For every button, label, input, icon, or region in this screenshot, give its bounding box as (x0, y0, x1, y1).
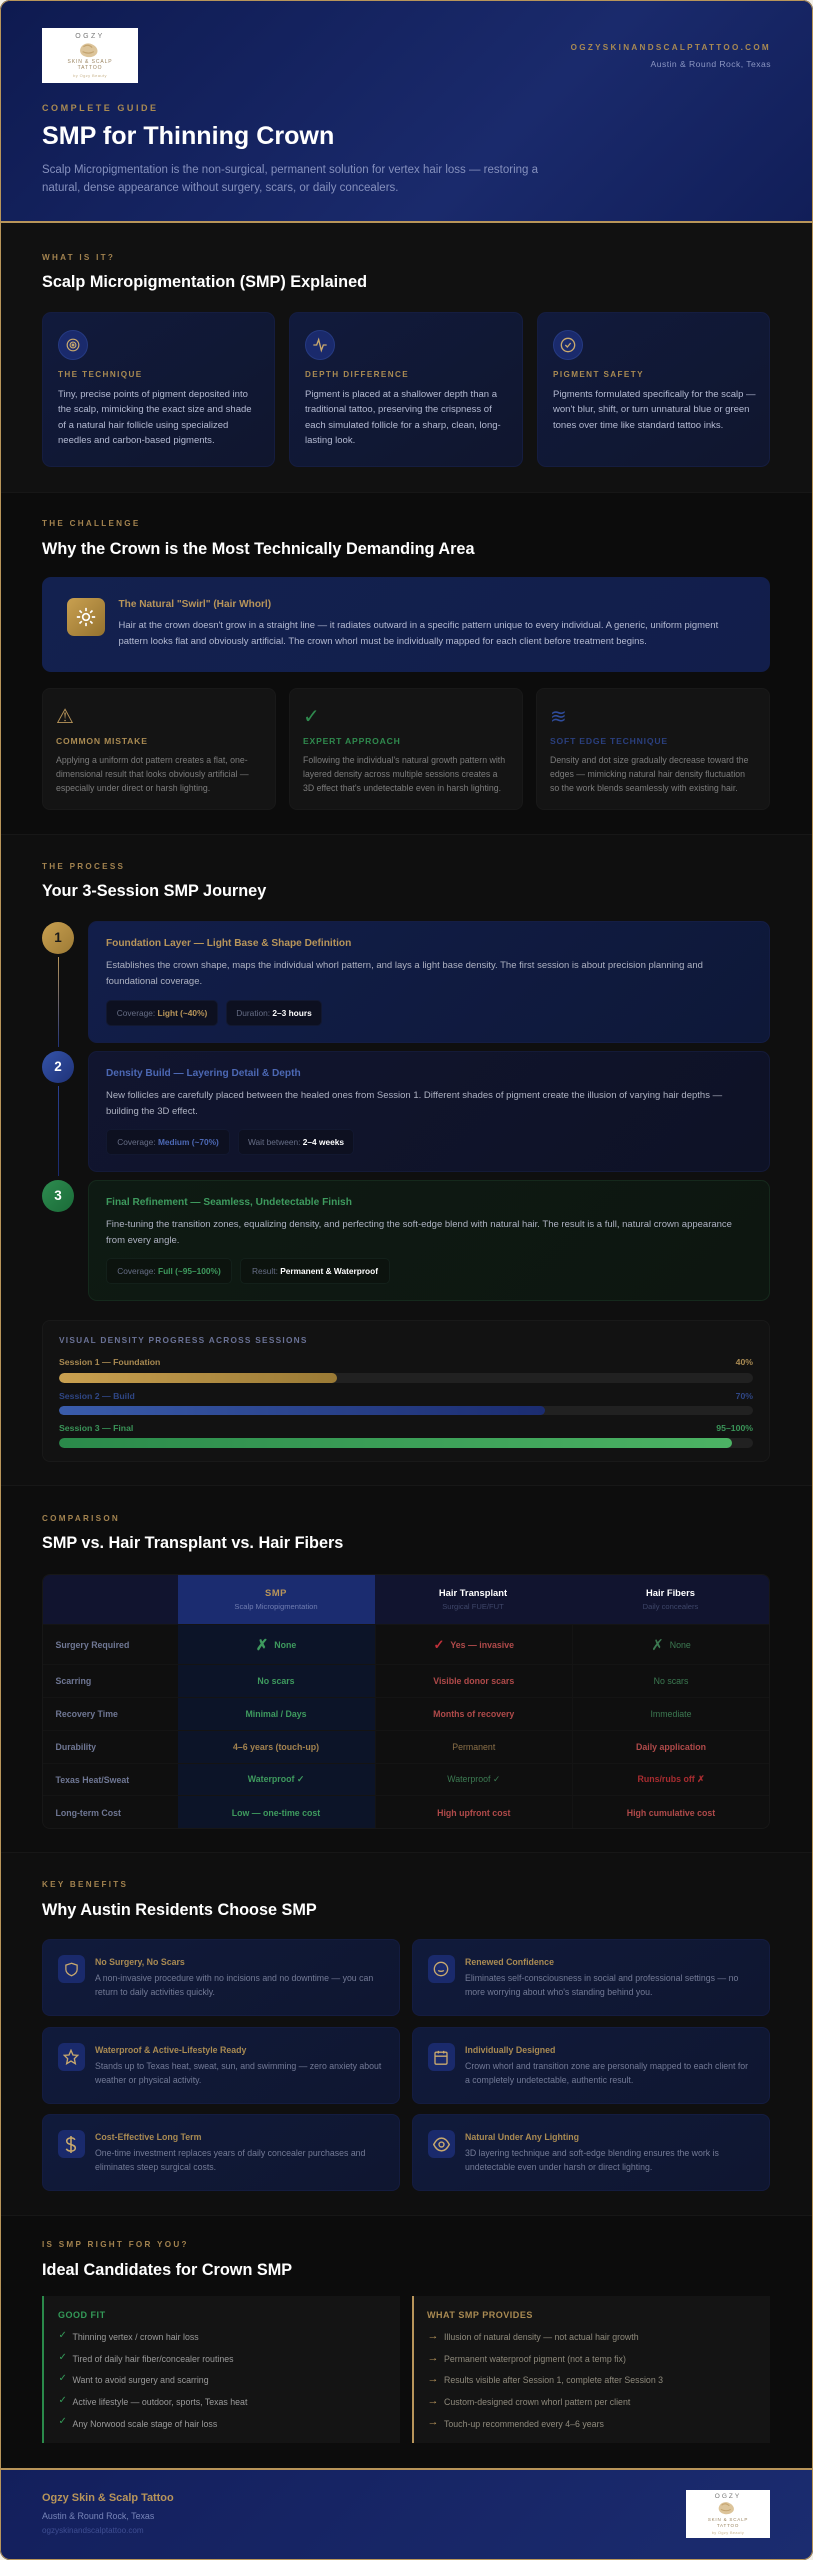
callout text: Hair at the crown doesn't grow in a straight line — it radiates outward in a specific pattern unique to every individual. A generic, uniform pigment (118, 620, 718, 631)
card: depth difference: each simulated follicle for a sharp, clean, long- (305, 420, 501, 431)
row: recovery time: Months of recovery (433, 1709, 514, 1719)
row: scarring: No scars (257, 1676, 295, 1686)
step number 2 (42, 1051, 74, 1083)
row: durability (43, 1730, 769, 1763)
benefit: natural lighting (412, 2114, 770, 2191)
row: long-term cost: Low — one-time cost (232, 1808, 320, 1818)
card: depth difference: DEPTH DIFFERENCE (305, 370, 409, 379)
eyebrow: COMPLETE GUIDE (42, 103, 159, 113)
section label: benefits: KEY BENEFITS (42, 1880, 128, 1889)
benefit: individually designed: a completely undetectable, authentic result. (465, 2075, 633, 2085)
step number 3 (42, 1180, 74, 1212)
callout: natural swirl (42, 577, 770, 672)
card: the technique: the scalp, mimicking the exact size and shade (58, 404, 252, 415)
card: expert approach: Following the individual's natural growth pattern with (303, 755, 505, 765)
step 1 card: foundational coverage. (106, 976, 202, 987)
row: surgery required (43, 1624, 769, 1664)
section heading: process: Your 3-Session SMP Journey (42, 882, 266, 900)
section heading: what is it: Scalp Micropigmentation (SMP) Explained (42, 273, 367, 291)
footer logo mark (718, 2502, 734, 2514)
list: good fit (58, 2330, 248, 2429)
benefit: cost-effective: Cost-Effective Long Term (95, 2132, 201, 2142)
list: good fit: Any Norwood scale stage of hair loss (72, 2419, 217, 2429)
card: common mistake: especially under direct or harsh lighting. (56, 783, 210, 793)
row: texas heat (43, 1763, 769, 1795)
list: what smp provides: → (428, 2330, 438, 2342)
list: what smp provides: Permanent waterproof pigment (not a temp fix) (444, 2354, 626, 2364)
panel: what smp provides: WHAT SMP PROVIDES (427, 2310, 533, 2320)
benefit: individually designed: Individually Designed (465, 2045, 555, 2055)
chip: wait (238, 1129, 354, 1155)
section background: challenge (0, 492, 813, 834)
row: durability: 4–6 years (touch-up) (233, 1742, 319, 1752)
list: what smp provides (428, 2330, 663, 2429)
row: durability: Durability (56, 1742, 96, 1752)
icon: star (58, 2043, 84, 2071)
section label: candidates: IS SMP RIGHT FOR YOU? (42, 2240, 189, 2249)
benefit: waterproof (42, 2027, 400, 2104)
website: OGZYSKINANDSCALPTATTOO.COM (571, 43, 771, 52)
icon: warning: ⚠ (56, 706, 74, 728)
logo: OGZY (75, 32, 105, 40)
chip: result: Result: Permanent & Waterproof (252, 1266, 378, 1276)
subtitle: natural, dense appearance without surgery, scars, or daily concealers. (42, 182, 398, 194)
benefit: renewed confidence: Eliminates self-consciousness in social and professional settings — no (465, 1973, 738, 1983)
row: surgery required: Surgery Required (56, 1640, 129, 1650)
icon: smile (428, 1955, 454, 1983)
benefit: cost-effective: eliminates steep surgical costs. (95, 2162, 216, 2172)
chip: coverage (106, 1129, 230, 1155)
list: what smp provides: → (428, 2416, 438, 2428)
card: soft edge technique (536, 688, 770, 810)
list: good fit: ✓ (58, 2373, 67, 2384)
list: what smp provides: → (428, 2352, 438, 2364)
card: the technique: needles and carbon-based pigments. (58, 435, 215, 446)
title: SMP for Thinning Crown (42, 122, 334, 150)
step 3 card: Fine-tuning the transition zones, equalizing density, and perfecting the soft-edge blend with natural hair. The result is a full, natural crown appearance (106, 1219, 732, 1230)
benefit: cost-effective (42, 2114, 400, 2191)
logo mark (80, 43, 98, 58)
icon: calendar (428, 2043, 454, 2071)
row: scarring: No scars (654, 1676, 688, 1686)
card: expert approach: EXPERT APPROACH (303, 736, 401, 746)
card: soft edge technique: Density and dot size gradually decrease toward the (550, 755, 748, 765)
bar: session 1: 40% (736, 1357, 753, 1367)
row: durability: Daily application (636, 1742, 706, 1752)
section heading: challenge: Why the Crown is the Most Technically Demanding Area (42, 540, 474, 558)
list: good fit: Want to avoid surgery and scarring (72, 2375, 209, 2385)
list: what smp provides: → (428, 2373, 438, 2385)
icon: dollar (58, 2130, 84, 2158)
row: recovery time: Minimal / Days (245, 1709, 307, 1719)
benefit: no surgery: No Surgery, No Scars (95, 1957, 185, 1967)
panel: good fit (42, 2296, 400, 2443)
row: surgery required: ✓ (434, 1636, 444, 1652)
callout title: The Natural "Swirl" (Hair Whorl) (118, 599, 271, 610)
table header (43, 1575, 769, 1625)
benefit: cost-effective: One-time investment replaces years of daily concealer purchases and (95, 2148, 365, 2158)
section label: comparison: COMPARISON (42, 1514, 120, 1523)
list: good fit: Tired of daily hair fiber/concealer routines (72, 2354, 234, 2364)
step 3 card: from every angle. (106, 1235, 179, 1246)
row: surgery required: None (274, 1640, 296, 1650)
list: what smp provides: → (428, 2394, 438, 2406)
list: good fit: Active lifestyle — outdoor, sports, Texas heat (72, 2397, 247, 2407)
row: scarring (43, 1664, 769, 1697)
card: expert approach: layered density across multiple sessions creates a (303, 769, 498, 779)
column: hair transplant: Surgical FUE/FUT (442, 1602, 504, 1611)
card: depth difference: traditional tattoo, preserving the crispness of (305, 404, 492, 415)
card: common mistake: Applying a uniform dot pattern creates a flat, one- (56, 755, 248, 765)
icon: check circle (553, 330, 583, 360)
footer (0, 2468, 813, 2560)
benefit: natural lighting: undetectable even under harsh or direct lighting. (465, 2162, 652, 2172)
icon: eye (428, 2130, 454, 2158)
panel: good fit: GOOD FIT (58, 2310, 106, 2320)
column: SMP: Scalp Micropigmentation (234, 1602, 318, 1611)
benefit: no surgery: return to daily activities quickly. (95, 1987, 215, 1997)
step number 3: 3 (54, 1188, 62, 1203)
callout text: pattern looks flat and obviously artificial. The crown whorl must be individually mapped for each client before treatment begins. (118, 636, 647, 647)
icon: shield (58, 1955, 84, 1983)
card: depth difference (289, 312, 523, 467)
chip: coverage: Coverage: Medium (~70%) (117, 1137, 219, 1147)
list: what smp provides: Results visible after Session 1, complete after Session 3 (444, 2375, 663, 2385)
section background: benefits (0, 1852, 813, 2215)
card: soft edge technique: so the work blends seamlessly with existing hair. (550, 783, 738, 793)
section heading: benefits: Why Austin Residents Choose SMP (42, 1901, 317, 1919)
row: scarring: Visible donor scars (433, 1676, 514, 1686)
row: surgery required: ✗ (651, 1636, 664, 1654)
row: recovery time: Recovery Time (56, 1709, 118, 1719)
footer logo: SKIN & SCALP (708, 2517, 748, 2522)
card: common mistake: dimensional result that looks obviously artificial — (56, 769, 249, 779)
row: long-term cost: Long-term Cost (56, 1808, 121, 1818)
benefit: waterproof: Stands up to Texas heat, sweat, sun, and swimming — zero anxiety about (95, 2061, 381, 2071)
bar: session 2: Session 2 — Build (59, 1390, 135, 1400)
list: what smp provides: Touch-up recommended every 4–6 years (444, 2419, 604, 2429)
panel: what smp provides (412, 2296, 770, 2443)
row: long-term cost: High cumulative cost (627, 1808, 715, 1818)
card: common mistake (42, 688, 276, 810)
benefit: natural lighting: Natural Under Any Lighting (465, 2132, 579, 2142)
card: the technique (42, 312, 275, 467)
list: good fit: Thinning vertex / crown hair loss (72, 2332, 199, 2342)
step 1 card (88, 921, 770, 1043)
benefit: individually designed: Crown whorl and transition zone are personally mapped to each client for (465, 2061, 748, 2071)
column: hair fibers: Hair Fibers (646, 1587, 695, 1598)
step 3 card: Final Refinement — Seamless, Undetectable Finish (106, 1197, 352, 1208)
row: recovery time (43, 1697, 769, 1730)
card: pigment safety: Pigments formulated specifically for the scalp — (553, 388, 756, 400)
section label: challenge: THE CHALLENGE (42, 519, 141, 528)
benefit: no surgery (42, 1939, 400, 2016)
list: what smp provides: Illusion of natural density — not actual hair growth (444, 2332, 639, 2342)
logo: TATTOO (78, 65, 102, 71)
step number 1 (42, 922, 74, 954)
column: hair transplant (439, 1587, 507, 1611)
bar: session 2: 70% (736, 1390, 753, 1400)
footer location: Austin & Round Rock, Texas (42, 2511, 154, 2521)
chip: coverage: Coverage: Full (~95–100%) (117, 1266, 221, 1276)
bar: session 3 (59, 1423, 753, 1448)
benefit: renewed confidence: more worrying about who's standing behind you. (465, 1987, 652, 1997)
benefit: no surgery: A non-invasive procedure with no incisions and no downtime — you can (95, 1973, 373, 1983)
footer logo: by Ogzy Beauty (712, 2530, 744, 2534)
row: recovery time: Immediate (650, 1709, 692, 1719)
row: texas heat: Waterproof ✓ (248, 1774, 304, 1784)
bar: session 3: 95–100% (716, 1423, 753, 1433)
benefit: natural lighting: 3D layering technique and soft-edge blending ensures the work is (465, 2148, 719, 2158)
row: surgery required: ✗ (256, 1636, 268, 1654)
step 2 card: building the 3D effect. (106, 1106, 198, 1117)
step 1 card: Foundation Layer — Light Base & Shape Definition (106, 938, 351, 949)
column: SMP: SMP (265, 1587, 287, 1598)
list: good fit: ✓ (58, 2416, 67, 2427)
column: SMP (178, 1575, 374, 1625)
list: what smp provides: Custom-designed crown whorl pattern per client (444, 2397, 630, 2407)
row: long-term cost: High upfront cost (437, 1808, 510, 1818)
section heading: comparison: SMP vs. Hair Transplant vs. Hair Fibers (42, 1534, 343, 1552)
chip: duration: Duration: 2–3 hours (236, 1008, 312, 1018)
column: hair fibers: Daily concealers (643, 1602, 698, 1611)
list: good fit: ✓ (58, 2330, 67, 2341)
section background: process (0, 834, 813, 1485)
card: pigment safety: PIGMENT SAFETY (553, 370, 644, 379)
panel title: VISUAL DENSITY PROGRESS ACROSS SESSIONS (59, 1335, 308, 1345)
footer logo: TATTOO (717, 2522, 739, 2528)
section background: what is it (0, 223, 813, 492)
connector 2 to 3 (58, 1086, 59, 1176)
column: hair fibers (643, 1587, 698, 1611)
icon: pulse (305, 330, 335, 360)
comparison table (42, 1574, 770, 1829)
icon: target (58, 330, 88, 360)
bar: session 1: Session 1 — Foundation (59, 1357, 160, 1367)
card: the technique: THE TECHNIQUE (58, 370, 143, 379)
step number 2: 2 (54, 1059, 62, 1074)
card: soft edge technique: SOFT EDGE TECHNIQUE (550, 736, 668, 746)
card: pigment safety: tones over time like standard tattoo inks. (553, 420, 723, 431)
icon: sun whorl (67, 598, 105, 636)
step 2 card: Density Build — Layering Detail & Depth (106, 1068, 301, 1079)
row: durability: Permanent (452, 1742, 495, 1752)
row: texas heat: Waterproof ✓ (447, 1774, 500, 1784)
row: long-term cost (43, 1795, 769, 1829)
benefit: renewed confidence: Renewed Confidence (465, 1957, 554, 1967)
bar: session 3: Session 3 — Final (59, 1423, 133, 1433)
row: texas heat: Runs/rubs off ✗ (638, 1774, 704, 1784)
bar: session 1 (59, 1357, 753, 1383)
benefit: renewed confidence (412, 1939, 770, 2016)
step 2 card: New follicles are carefully placed between the healed ones from Session 1. Different shades of pigment create the illusion of varying hair depths — (106, 1090, 722, 1101)
section background: comparison (0, 1485, 813, 1852)
icon: waves: ≋ (550, 706, 567, 728)
card: depth difference: Pigment is placed at a shallower depth than a (305, 388, 497, 400)
subtitle (42, 164, 538, 194)
row: texas heat: Texas Heat/Sweat (56, 1774, 129, 1784)
section background: candidates (0, 2215, 813, 2469)
card: expert approach (289, 688, 523, 810)
footer logo (686, 2490, 770, 2538)
chip: coverage (106, 1000, 218, 1026)
subtitle: Scalp Micropigmentation is the non-surgical, permanent solution for vertex hair loss — restoring a (42, 164, 538, 176)
card: pigment safety: won't blur, shift, or turn unnatural blue or green (553, 404, 749, 415)
chip: result (240, 1258, 390, 1284)
logo: SKIN & SCALP (68, 59, 112, 65)
chip: coverage: Coverage: Light (~40%) (117, 1008, 207, 1018)
chip: duration (226, 1000, 322, 1026)
logo: by Ogzy Beauty (73, 73, 107, 78)
card: pigment safety (537, 312, 770, 467)
callout text (118, 620, 718, 647)
section heading: candidates: Ideal Candidates for Crown SMP (42, 2261, 292, 2279)
section label: process: THE PROCESS (42, 862, 125, 871)
step 1 card: Establishes the crown shape, maps the individual whorl pattern, and lays a light base density. The first session is about precision planning and (106, 960, 703, 971)
step 2 card (88, 1051, 770, 1172)
step 3 card (88, 1180, 770, 1301)
icon: check: ✓ (303, 706, 320, 728)
card: expert approach: 3D effect that's undetectable even in harsh lighting. (303, 783, 501, 793)
column: hair transplant: Hair Transplant (439, 1587, 507, 1598)
list: good fit: ✓ (58, 2352, 67, 2362)
card: the technique: of a natural hair follicle using specialized (58, 420, 228, 431)
bar: session 2 (59, 1390, 753, 1415)
chip: coverage (106, 1258, 232, 1284)
footer logo: OGZY (715, 2493, 741, 2500)
logo (42, 28, 138, 83)
list: good fit: ✓ (58, 2394, 67, 2406)
location: Austin & Round Rock, Texas (651, 59, 771, 69)
section label: what is it: WHAT IS IT? (42, 253, 115, 262)
benefit: waterproof: Waterproof & Active-Lifestyle Ready (95, 2045, 246, 2055)
row: scarring: Scarring (56, 1676, 91, 1686)
card: the technique: Tiny, precise points of pigment deposited into (58, 388, 248, 400)
footer url: ogzyskinandscalptattoo.com (42, 2526, 144, 2535)
card: depth difference: lasting look. (305, 435, 355, 446)
connector 1 to 2 (58, 957, 59, 1047)
card: common mistake: COMMON MISTAKE (56, 736, 148, 746)
benefit: waterproof: weather or physical activity. (95, 2075, 201, 2085)
card: soft edge technique: edges — mimicking natural hair density fluctuation (550, 769, 745, 779)
benefit: individually designed (412, 2027, 770, 2104)
row: surgery required: None (670, 1640, 691, 1650)
chip: wait: Wait between: 2–4 weeks (248, 1137, 344, 1147)
row: surgery required: Yes — invasive (450, 1640, 514, 1650)
density progress panel (42, 1320, 770, 1462)
step number 1: 1 (54, 930, 62, 945)
footer brand: Ogzy Skin & Scalp Tattoo (42, 2492, 174, 2504)
header banner (0, 0, 813, 222)
